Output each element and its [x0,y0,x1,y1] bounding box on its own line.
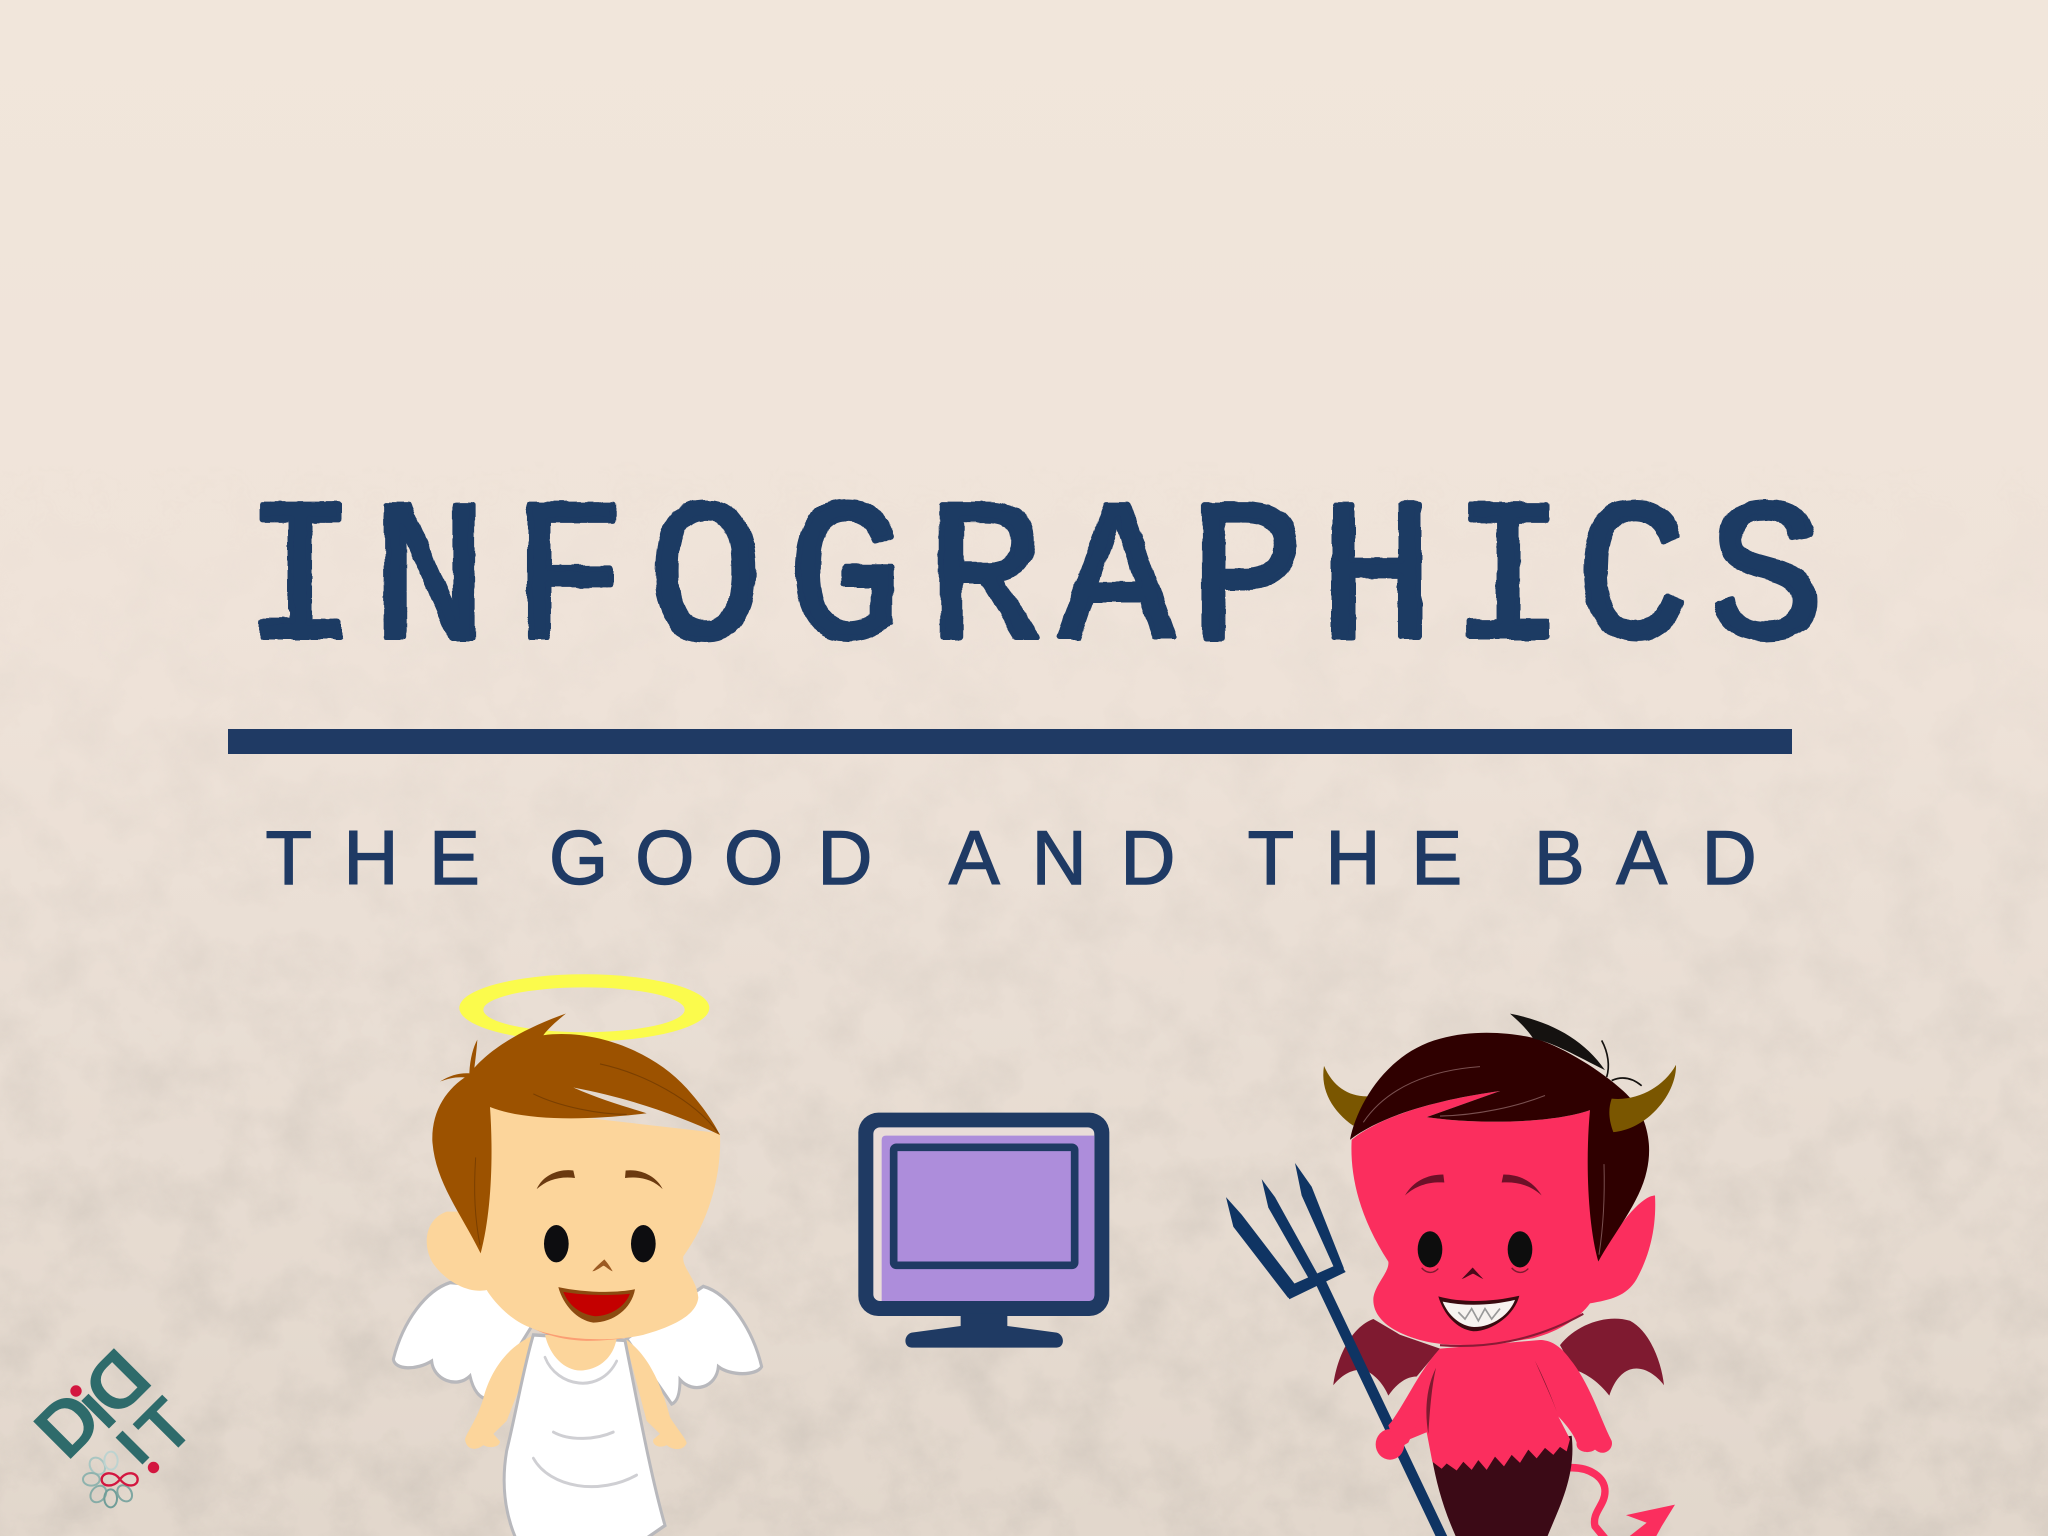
devil eyes [1418,1231,1532,1272]
angel hair [432,1014,720,1253]
logo letter T: T [122,1384,209,1471]
angel halo [459,974,709,1042]
angel right arm [625,1339,687,1449]
devil left wing [1333,1319,1440,1396]
devil body shading [1426,1361,1557,1434]
logo red dots [70,1385,159,1473]
angel robe [504,1335,665,1536]
monitor screen opening [873,1127,1094,1301]
angel head [427,1107,720,1341]
illustration: devil [1226,1014,1676,1536]
subtitle: THE [265,816,480,901]
angel mouth [558,1287,635,1323]
angel left arm [465,1335,535,1449]
angel eyebrows [537,1170,663,1189]
devil hand on trident [1376,1404,1420,1460]
devil skirt [1432,1436,1572,1536]
devil tail [1570,1468,1675,1536]
subtitle: GOOD [549,816,872,901]
angel nose [592,1259,613,1271]
devil mouth [1438,1296,1519,1331]
illustration: angel [393,974,762,1536]
angel left wing [393,1283,533,1398]
devil eyebrows [1405,1175,1542,1195]
devil right wing [1560,1319,1664,1396]
angel robe folds [533,1357,637,1487]
logo flower [83,1452,138,1507]
angel eyes [544,1225,656,1262]
logo letter i: ı [58,1370,131,1444]
monitor inner screen [894,1147,1075,1265]
angel right wing [627,1286,762,1404]
logo mirrored letter D: D [67,1333,167,1433]
title: INFOGRAPHICS [243,470,1823,697]
devil nose [1462,1268,1483,1279]
monitor frame [858,1113,1109,1316]
subtitle: AND [949,816,1175,901]
devil right horn [1609,1065,1676,1132]
illustration: computer monitor [858,1113,1109,1348]
devil chin shadow [1440,1314,1583,1346]
logo letter D: D [18,1374,118,1475]
monitor stand [905,1313,1063,1348]
logo letter I: ı [94,1409,164,1479]
devil body [1390,1340,1612,1471]
subtitle: THE [1248,816,1462,901]
angel neck [545,1335,617,1371]
devil trident [1226,1163,1448,1536]
logo: Did IT [18,1333,209,1507]
devil left horn [1323,1066,1372,1126]
subtitle: BAD [1534,816,1757,901]
divider bar [228,729,1792,754]
devil head [1351,1091,1655,1345]
devil hair [1350,1014,1649,1262]
subtitle [265,816,1757,901]
